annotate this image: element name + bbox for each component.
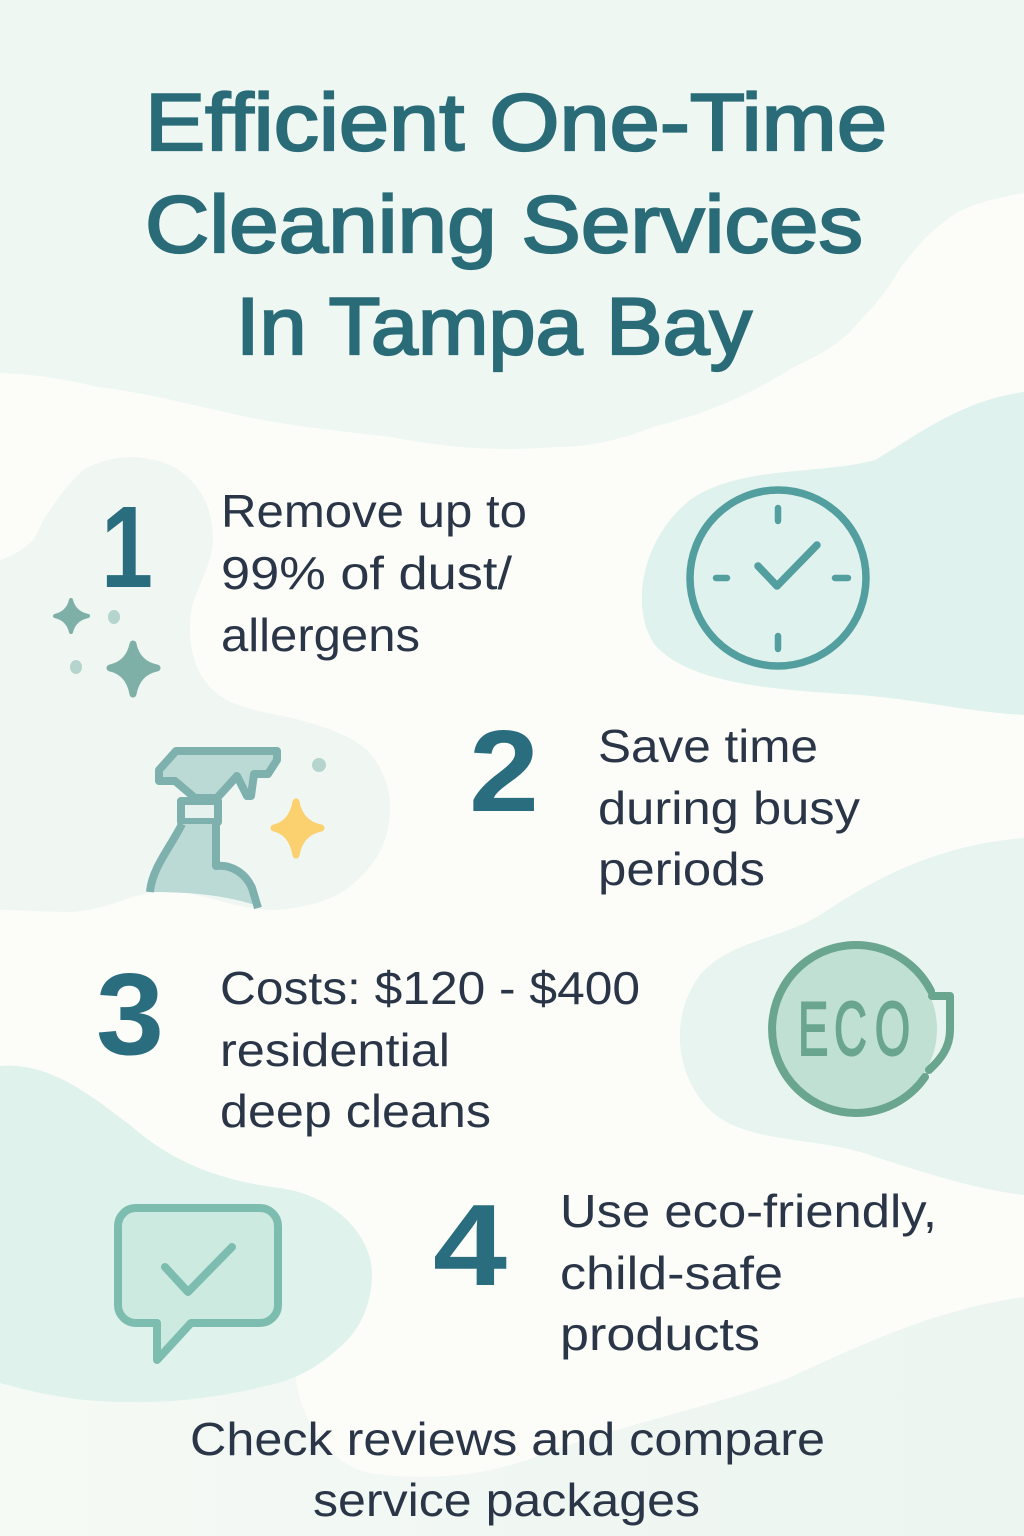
step 2 <box>469 706 860 895</box>
step 1 text: 99% of dust/ <box>221 547 512 599</box>
step 4 text: Use eco-friendly, <box>560 1185 937 1237</box>
footer note: Check reviews and compare <box>190 1413 825 1465</box>
step 1 text: Remove up to <box>221 485 527 537</box>
bottle body fill <box>149 824 258 906</box>
footer note: service packages <box>313 1474 700 1526</box>
step 3 text <box>220 962 640 1137</box>
blob: behind clock <box>642 392 1024 715</box>
title: Cleaning Services <box>145 180 863 270</box>
step 2 text: Save time <box>598 720 818 772</box>
step 2 text: periods <box>598 843 765 895</box>
title: Efficient One-Time <box>145 78 887 168</box>
step 3 <box>96 949 640 1137</box>
icon: clock <box>690 490 866 666</box>
step 4 text: child-safe <box>560 1247 783 1299</box>
step 4 text <box>560 1185 937 1360</box>
step 4 number: 4 <box>433 1180 507 1310</box>
blob: behind speech bubble <box>0 1066 372 1402</box>
icon: eco badge <box>769 945 950 1113</box>
bottle body outline <box>150 824 258 908</box>
title: In Tampa Bay <box>236 282 753 372</box>
step 2 number: 2 <box>469 706 539 836</box>
step 4 text: products <box>560 1308 760 1360</box>
icon: yellow sparkle <box>274 758 326 855</box>
bottle nozzle head <box>159 751 277 798</box>
step 3 text: deep cleans <box>220 1085 491 1137</box>
step 1 text: allergens <box>221 609 420 661</box>
step 4 <box>433 1180 937 1360</box>
blob: footer wave <box>0 1297 1024 1536</box>
icon: sparkles <box>55 600 157 694</box>
header wave background <box>0 0 1024 449</box>
bottle collar <box>181 801 218 822</box>
icon: speech bubble with check <box>118 1208 278 1360</box>
step 1 text <box>221 485 527 661</box>
icon: eco badge: ECO <box>798 987 910 1072</box>
step 2 text <box>598 720 860 895</box>
icon: spray bottle <box>149 751 277 908</box>
step 3 number: 3 <box>96 949 164 1079</box>
footer note <box>190 1413 825 1526</box>
title <box>145 78 887 372</box>
blob: behind step 1 and spray bottle <box>0 457 390 912</box>
blob: behind eco badge <box>680 838 1024 1195</box>
step 2 text: during busy <box>598 782 860 834</box>
step 3 text: Costs: $120 - $400 <box>220 962 640 1014</box>
step 3 text: residential <box>220 1024 450 1076</box>
step 1 number: 1 <box>101 482 153 612</box>
step 1 <box>101 482 527 661</box>
